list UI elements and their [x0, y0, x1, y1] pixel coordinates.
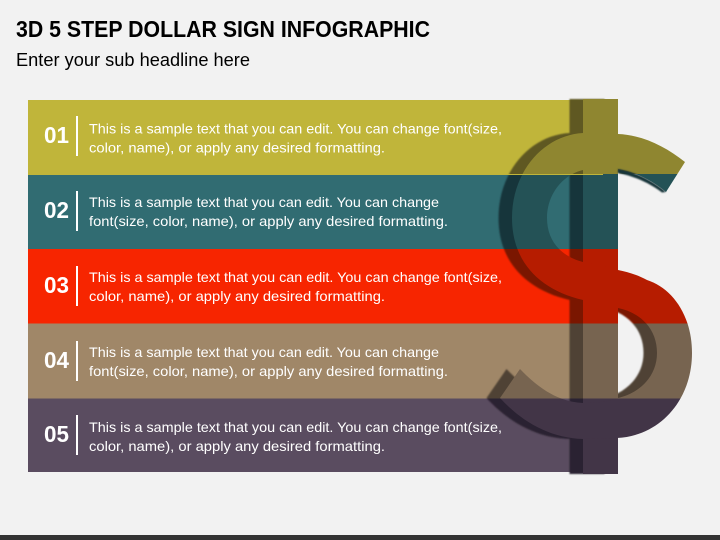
- text 04: font(size, color, name), or apply any desired formatting.: [89, 364, 448, 379]
- dollar slice: teal: [512, 174, 678, 249]
- text 05: color, name), or apply any desired formatting.: [89, 439, 385, 454]
- band 01 background: [28, 100, 618, 175]
- step 03: [44, 266, 502, 306]
- text 03: [89, 270, 502, 304]
- number 04: 04: [44, 347, 69, 373]
- dollar slice: purple: [486, 398, 680, 476]
- dollar slice: teal shadow: [498, 175, 583, 249]
- text 01: [89, 122, 502, 156]
- dollar slice: olive: [508, 98, 685, 174]
- number 01: 01: [44, 122, 69, 148]
- text 02: font(size, color, name), or apply any desired formatting.: [89, 214, 448, 229]
- text 05: [89, 420, 502, 454]
- text 05: This is a sample text that you can edit. You can change font(size,: [89, 420, 502, 435]
- number 05: 05: [44, 421, 69, 447]
- text 04: [89, 345, 448, 379]
- icon: 3D dollar sign: [486, 99, 692, 474]
- sub headline: Enter your sub headline here: [16, 50, 250, 70]
- text 03: color, name), or apply any desired formatting.: [89, 289, 385, 304]
- title: 3D 5 STEP DOLLAR SIGN INFOGRAPHIC: [16, 16, 430, 42]
- text 02: This is a sample text that you can edit. You can change: [89, 195, 439, 210]
- text 03: This is a sample text that you can edit. You can change font(size,: [89, 270, 502, 285]
- step 02: [44, 191, 448, 231]
- text 04: This is a sample text that you can edit. You can change: [89, 345, 439, 360]
- dollar slice: tan: [486, 324, 692, 398]
- text 02: [89, 195, 448, 229]
- band 02 background: [28, 175, 618, 249]
- number 02: 02: [44, 197, 69, 223]
- number 03: 03: [44, 272, 69, 298]
- band 05 background: [28, 398, 618, 472]
- band 04 background: [28, 324, 618, 398]
- step 05: [44, 415, 502, 455]
- step 04: [44, 341, 448, 381]
- text 01: color, name), or apply any desired formatting.: [89, 140, 385, 156]
- text 01: This is a sample text that you can edit. You can change font(size,: [89, 122, 502, 136]
- dollar slice: teal tip shadow: [618, 169, 666, 192]
- band 03 background: [28, 249, 618, 324]
- footer bar: [0, 535, 720, 540]
- step 01: [44, 116, 502, 156]
- dollar slice: red: [503, 249, 688, 324]
